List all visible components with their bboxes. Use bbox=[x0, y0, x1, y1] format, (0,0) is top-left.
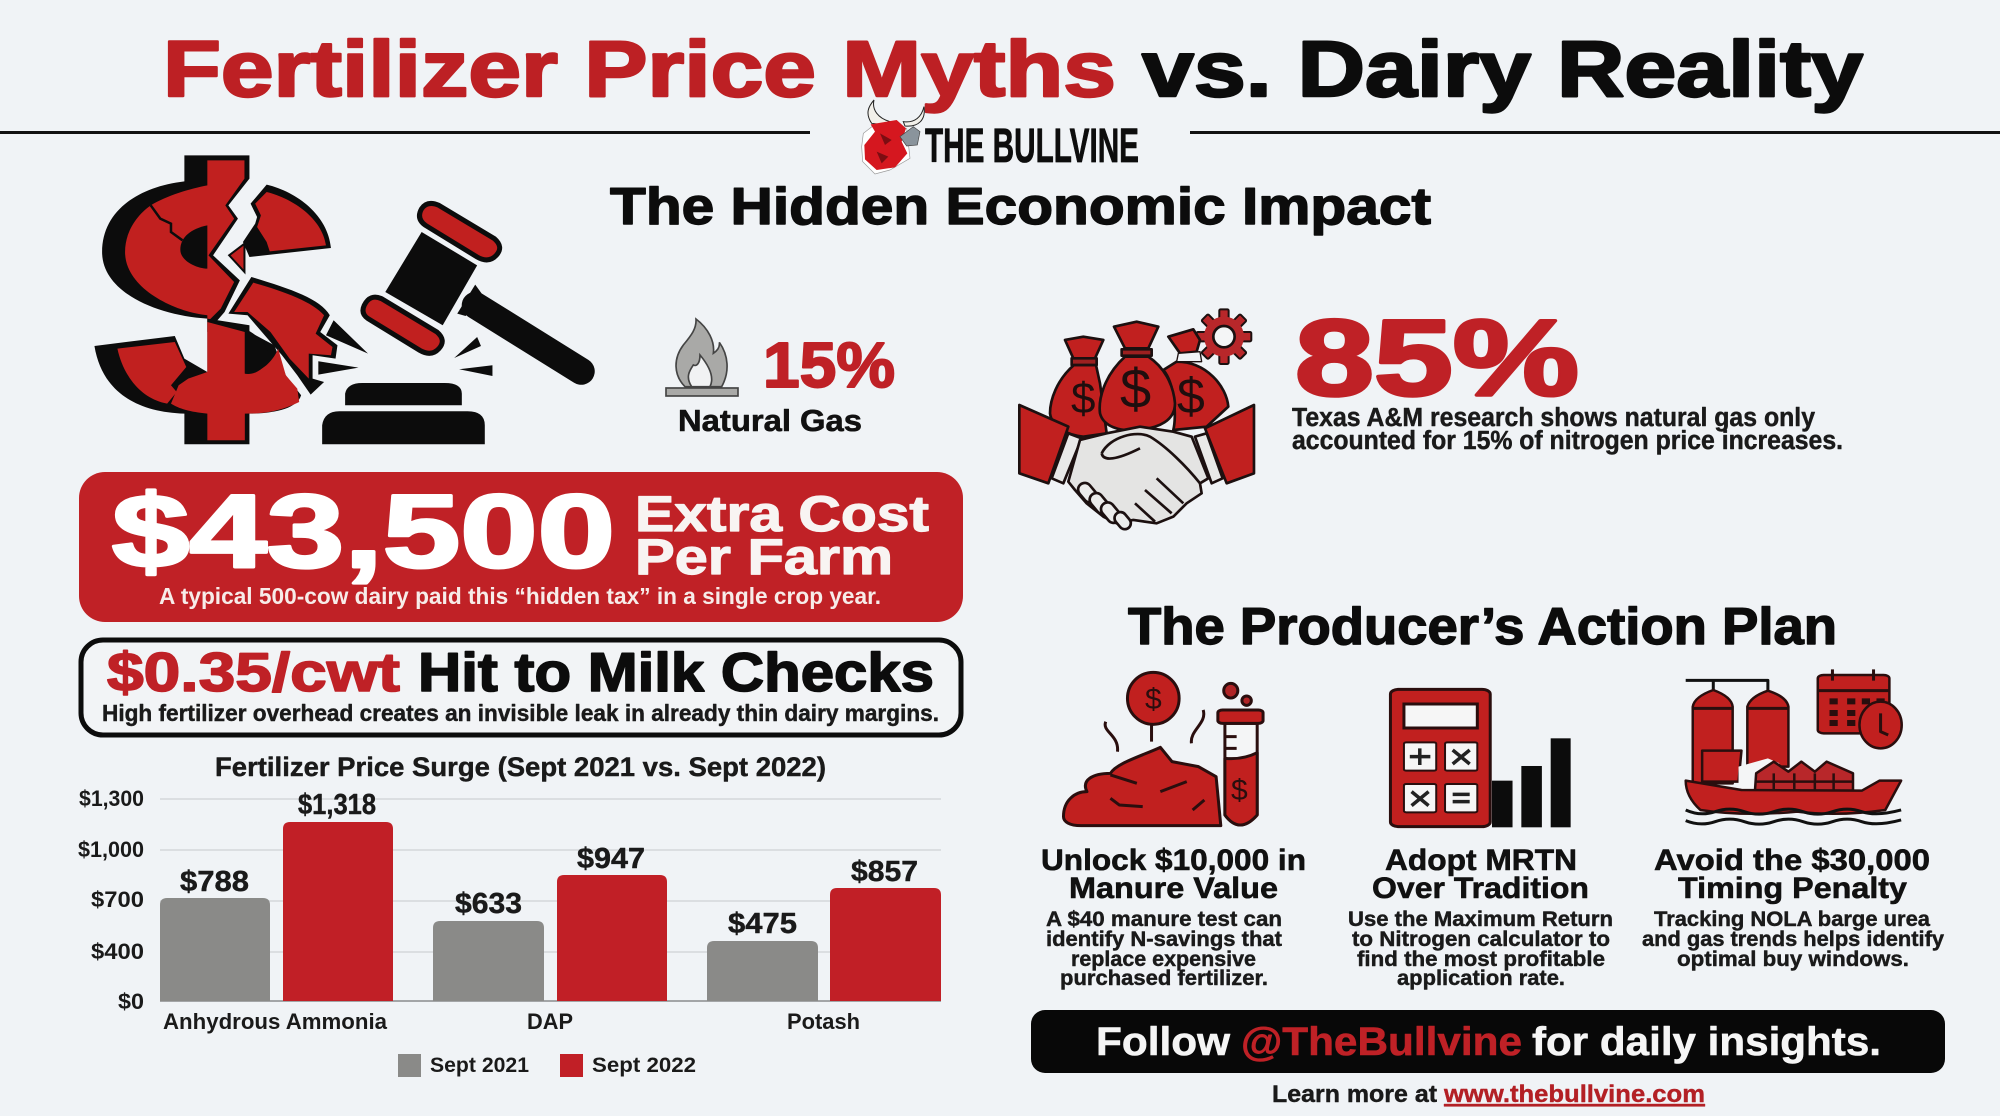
y axis labels: $400 bbox=[91, 939, 144, 964]
value labels: $1,318 bbox=[298, 789, 376, 821]
category labels: DAP bbox=[527, 1009, 573, 1034]
gavel head bbox=[385, 232, 477, 325]
call to action bar: for daily insights. bbox=[1532, 1020, 1881, 1064]
body text bbox=[1046, 908, 1282, 990]
category labels bbox=[163, 1009, 860, 1034]
callout: $0.35/cwt hit to milk checks bbox=[81, 640, 961, 735]
y axis labels bbox=[78, 786, 144, 1014]
y axis labels: $0 bbox=[118, 989, 144, 1014]
callout: $43,500 extra cost per farm: Per Farm bbox=[635, 529, 893, 585]
stat: 85% and description: 85% bbox=[1295, 297, 1579, 418]
stat: natural gas 15%: Natural Gas bbox=[678, 403, 862, 438]
middle bag bbox=[1100, 322, 1175, 430]
body text: replace expensive bbox=[1071, 948, 1256, 971]
icon: bull head bbox=[862, 100, 924, 174]
title: vs. Dairy Reality bbox=[1142, 24, 1863, 113]
cuffs bbox=[1019, 405, 1254, 483]
heading: Avoid the $30,000 bbox=[1654, 844, 1930, 877]
callout: $43,500 extra cost per farm: $43,500 bbox=[112, 474, 615, 590]
value labels: $475 bbox=[728, 908, 797, 940]
callout: $0.35/cwt hit to milk checks: $0.35/cwt bbox=[107, 641, 400, 703]
call to action bar bbox=[1031, 1010, 1945, 1073]
legend bbox=[398, 1053, 696, 1077]
body text: and gas trends helps identify bbox=[1642, 928, 1944, 951]
call to action bar: Follow bbox=[1096, 1020, 1231, 1064]
panel: MRTN bbox=[1348, 689, 1613, 990]
callout: $43,500 extra cost per farm bbox=[79, 472, 963, 622]
dollar signs on money bags: $ bbox=[1071, 374, 1095, 423]
stat: 85% and description bbox=[1292, 297, 1843, 455]
value labels: $947 bbox=[577, 843, 645, 875]
legend: Sept 2022 bbox=[592, 1053, 696, 1077]
call to action bar: @TheBullvine bbox=[1241, 1020, 1522, 1064]
dollar signs on money bags: $ bbox=[1120, 357, 1151, 420]
title: Fertilizer Price Myths bbox=[163, 24, 1116, 113]
dollar upper left piece bbox=[102, 155, 249, 332]
body text: Tracking NOLA barge urea bbox=[1654, 908, 1930, 931]
value labels: $788 bbox=[180, 866, 249, 898]
title bbox=[163, 24, 1863, 113]
body text: Use the Maximum Return bbox=[1348, 908, 1613, 931]
gavel base bbox=[322, 383, 485, 444]
body text: to Nitrogen calculator to bbox=[1352, 928, 1610, 951]
heading: The Producer's Action Plan: The Producer’s Action Plan bbox=[1128, 598, 1837, 656]
heading: The Hidden Economic Impact: The Hidden Economic Impact bbox=[610, 178, 1431, 236]
dollar upper right piece bbox=[229, 185, 331, 272]
footer link: www.thebullvine.com bbox=[1443, 1081, 1705, 1108]
callout: $0.35/cwt hit to milk checks: High fertilizer overhead creates an invisible leak in already thin dairy margins. bbox=[102, 700, 939, 726]
callout: $43,500 extra cost per farm: Extra Cost bbox=[635, 486, 929, 542]
icon: manure pile, coin and test tube bbox=[1063, 672, 1263, 826]
y axis labels: $1,000 bbox=[78, 837, 144, 862]
right bag bbox=[1163, 362, 1228, 430]
clasped hands bbox=[1068, 427, 1208, 523]
heading: Adopt MRTN bbox=[1385, 844, 1577, 877]
panel: timing penalty bbox=[1642, 669, 1944, 971]
body text: optimal buy windows. bbox=[1677, 948, 1909, 971]
dollar bottom pieces bbox=[94, 319, 301, 444]
panel: manure value bbox=[1041, 672, 1306, 990]
body text: A $40 manure test can bbox=[1046, 908, 1282, 931]
gavel bottom cap bbox=[363, 297, 442, 353]
bar chart: fertilizer price surge bbox=[78, 752, 941, 1077]
category labels: Potash bbox=[787, 1009, 860, 1034]
panel: timing penalty: Timing Penalty bbox=[1678, 872, 1907, 905]
footer link bbox=[1272, 1081, 1705, 1108]
stat: natural gas 15% bbox=[666, 319, 895, 438]
value labels: $857 bbox=[851, 856, 918, 888]
body text: application rate. bbox=[1397, 967, 1565, 990]
panel: manure value: Manure Value bbox=[1069, 872, 1278, 905]
category labels: Anhydrous Ammonia bbox=[163, 1009, 388, 1034]
icon: gas flame bbox=[666, 319, 738, 396]
gavel impact sparks bbox=[318, 320, 492, 376]
gavel handle bbox=[475, 305, 581, 371]
heading: Unlock $10,000 in bbox=[1041, 844, 1306, 877]
y axis labels: $700 bbox=[91, 887, 144, 912]
dollar signs on money bags bbox=[1071, 357, 1205, 424]
body text bbox=[1642, 908, 1944, 971]
left bag bbox=[1050, 337, 1107, 437]
value labels: $633 bbox=[455, 888, 522, 920]
icon: barge, silos and calendar bbox=[1686, 669, 1902, 824]
panel: MRTN: Over Tradition bbox=[1372, 872, 1589, 905]
stat: 85% and description: accounted for 15% of nitrogen price increases. bbox=[1292, 427, 1843, 455]
logo: The Bullvine: THE BULLVINE bbox=[925, 120, 1139, 173]
body text: purchased fertilizer. bbox=[1060, 967, 1268, 990]
stat: natural gas 15%: 15% bbox=[763, 329, 895, 401]
footer link: Learn more at bbox=[1272, 1081, 1437, 1108]
icon: cracked dollar sign and gavel bbox=[94, 155, 581, 444]
panel: manure value: $ bbox=[1145, 683, 1162, 716]
value labels bbox=[180, 789, 918, 940]
legend: Sept 2021 bbox=[430, 1053, 529, 1077]
chart title: Fertilizer Price Surge (Sept 2021 vs. Sept 2022) bbox=[215, 752, 826, 782]
body text: find the most profitable bbox=[1357, 948, 1605, 971]
gavel top cap bbox=[419, 203, 500, 260]
body text: identify N-savings that bbox=[1046, 928, 1282, 951]
bars bbox=[160, 822, 941, 1001]
callout: $0.35/cwt hit to milk checks: Hit to Milk Checks bbox=[418, 641, 934, 703]
dollar signs on money bags: $ bbox=[1177, 368, 1205, 424]
logo: The Bullvine bbox=[862, 100, 1139, 174]
y axis labels: $1,300 bbox=[79, 786, 144, 811]
callout: $43,500 extra cost per farm: A typical 500-cow dairy paid this “hidden tax” in a single crop year. bbox=[159, 583, 881, 609]
icon: calculator and bars bbox=[1390, 689, 1571, 827]
dollar lower middle piece bbox=[228, 277, 337, 395]
stat: 85% and description: Texas A&M research shows natural gas only bbox=[1292, 404, 1816, 432]
gear bbox=[1197, 309, 1251, 364]
panel: manure value: $ bbox=[1231, 774, 1248, 807]
icon: money bags and handshake bbox=[1019, 309, 1254, 532]
fingers bbox=[1075, 480, 1133, 532]
body text bbox=[1348, 908, 1613, 990]
